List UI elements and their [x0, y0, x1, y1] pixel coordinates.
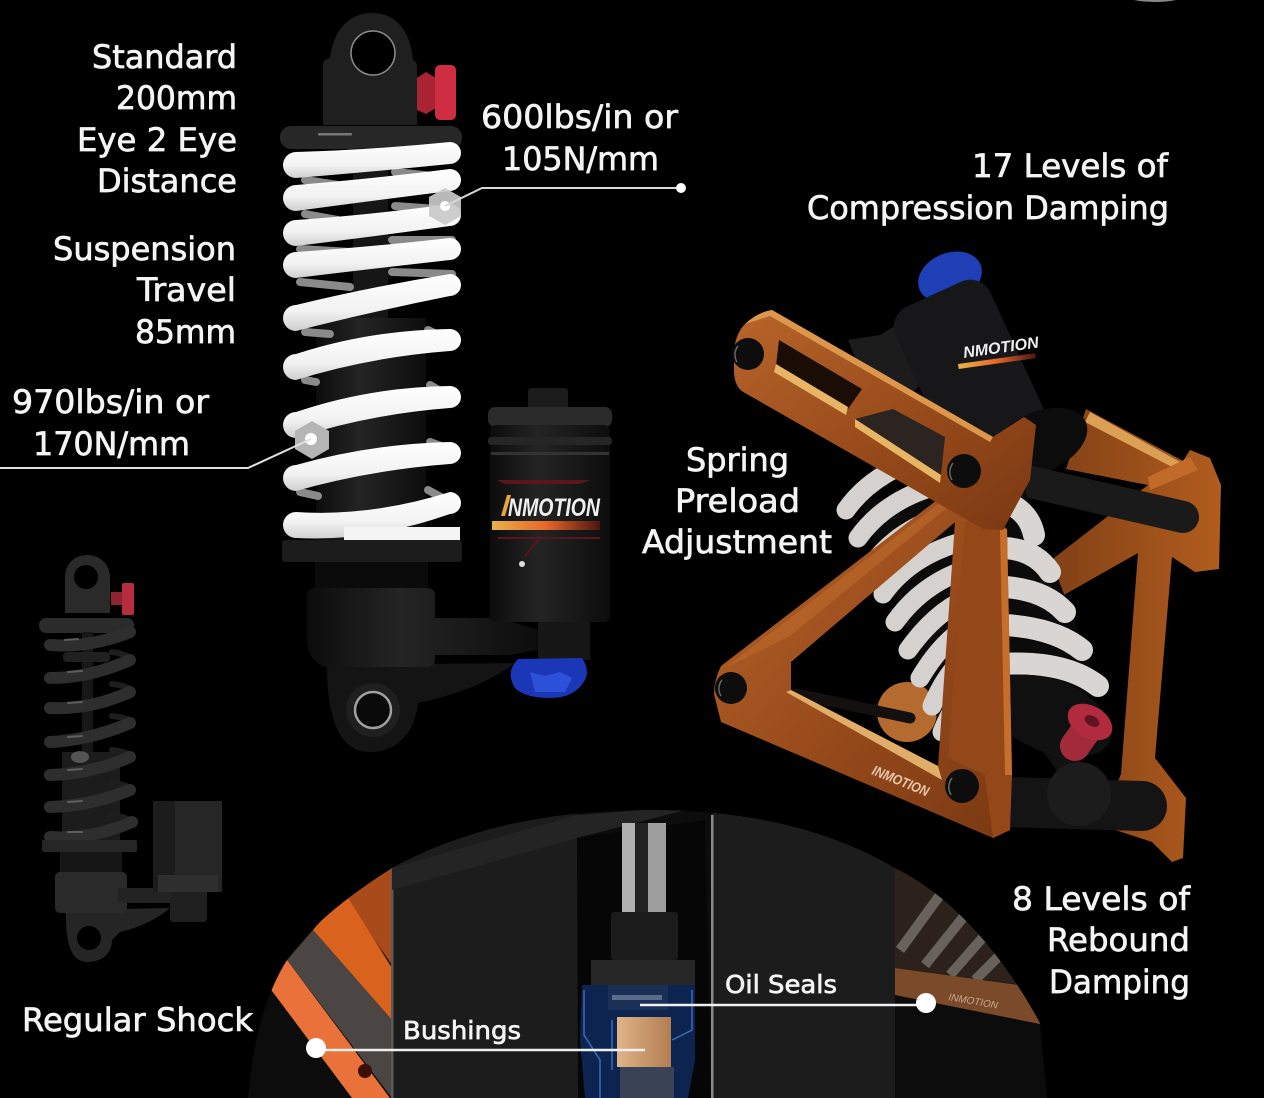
text: suspension travel: Travel	[136, 271, 236, 309]
lower spring seat and elbow	[976, 658, 1142, 826]
shock top eye mount	[323, 13, 417, 125]
arm window slot one	[776, 340, 862, 409]
small thread collar	[60, 852, 122, 872]
label: oil seals: Oil Seals	[725, 970, 837, 999]
text: compression damping	[807, 147, 1169, 227]
small lower seat	[42, 840, 137, 852]
text: 600lbs/in spring rate: 105N/mm	[502, 140, 659, 178]
canister logo bar	[958, 353, 1036, 369]
text: rebound damping	[1012, 880, 1191, 1001]
grey band	[287, 930, 392, 1098]
right dark panel	[712, 800, 895, 1098]
small arm	[118, 888, 207, 922]
rear frame	[1045, 409, 1221, 862]
lower spring seat	[282, 540, 462, 562]
bright orange stripe	[269, 960, 390, 1098]
small reservoir	[153, 801, 222, 892]
text: eye to eye distance	[77, 38, 237, 200]
small coil spring	[50, 632, 132, 837]
red adjuster knob	[417, 65, 456, 120]
dark orange frame piece	[340, 868, 392, 964]
label: bushings: Bushings	[403, 1016, 521, 1045]
text: eye to eye distance: Distance	[97, 162, 237, 200]
bushings leader	[306, 1038, 645, 1058]
centre channel	[577, 838, 578, 1054]
small lower eye	[66, 908, 170, 962]
right brown wedge	[895, 868, 1017, 984]
text: spring preload: Spring	[686, 441, 789, 479]
oil seals leader	[640, 993, 936, 1013]
main shock absorber	[280, 13, 612, 752]
text: compression damping: 17 Levels of	[972, 147, 1169, 185]
orange swing arm assembly	[714, 242, 1221, 862]
text: suspension travel: Suspension	[53, 230, 236, 268]
inner tube	[620, 1067, 674, 1098]
text: compression damping: Compression Damping	[807, 189, 1169, 227]
arm window slot two	[855, 409, 945, 475]
small lower cylinder	[55, 872, 127, 913]
small back coil arcs	[112, 652, 132, 822]
callout: 970lbs/in leader	[0, 421, 329, 468]
piston rod	[635, 823, 648, 912]
dome background and panels	[240, 800, 1060, 1098]
crossing rods	[797, 482, 1183, 742]
front triangular frame	[714, 490, 1010, 838]
logo i mark	[501, 495, 511, 516]
text: 970lbs/in spring rate: 170N/mm	[33, 425, 190, 463]
blue compression knob	[910, 242, 990, 312]
gas reservoir canister	[488, 388, 612, 622]
reservoir neck	[538, 622, 590, 660]
text: 970lbs/in spring rate	[12, 383, 210, 463]
inner shaft and damper body	[316, 148, 426, 542]
rod cap	[611, 912, 678, 960]
text: rebound damping: 8 Levels of	[1012, 880, 1191, 918]
mid orange stripe	[313, 893, 392, 1020]
frame bolts	[715, 338, 981, 803]
left dark panel	[392, 800, 578, 1098]
top arm	[734, 310, 1036, 530]
back coil segments	[300, 172, 452, 503]
regular shock (small dark)	[39, 555, 222, 962]
seal housing	[591, 960, 695, 986]
front leg	[725, 495, 1012, 838]
lower eye mount	[327, 663, 515, 752]
INMOTION logo: NMOTION	[508, 494, 601, 522]
callout: 600lbs/in leader	[429, 183, 686, 225]
bronze bushing	[617, 1017, 671, 1067]
small shaft and body	[62, 632, 120, 842]
small shock top eye	[65, 555, 110, 613]
damper canister (angled)	[848, 242, 1098, 490]
blue rebound knob	[511, 658, 587, 698]
text: rebound damping: Rebound	[1047, 921, 1190, 959]
angled coil spring	[846, 455, 1100, 740]
wedge copper band	[895, 968, 1045, 1025]
small red knob	[111, 583, 134, 615]
text: 970lbs/in spring rate: 970lbs/in or	[12, 383, 210, 421]
text: eye to eye distance: Eye 2 Eye	[77, 121, 237, 159]
canister logo: NMOTION	[962, 334, 1040, 362]
text: suspension travel: 85mm	[135, 313, 236, 351]
text: suspension travel	[53, 230, 236, 351]
text: spring preload: Adjustment	[642, 523, 832, 561]
text: regular shock: Regular Shock	[22, 1001, 253, 1039]
lower cylinder and arm	[307, 588, 538, 667]
cutaway detail dome	[240, 800, 1060, 1098]
logo in wedge: INMOTION	[947, 992, 999, 1012]
text: rebound damping: Damping	[1049, 963, 1190, 1001]
frame logo: INMOTION	[870, 762, 932, 800]
upper spring seat	[280, 126, 462, 149]
red rebound knob	[1061, 696, 1119, 748]
threaded collar	[315, 562, 428, 590]
white coil spring	[283, 142, 461, 541]
text: 600lbs/in spring rate: 600lbs/in or	[481, 98, 679, 136]
text: 600lbs/in spring rate	[481, 98, 679, 178]
text: eye to eye distance: Standard	[92, 38, 237, 76]
logo speed bar	[492, 521, 600, 530]
small upper seat	[39, 618, 134, 633]
text: eye to eye distance: 200mm	[116, 79, 237, 117]
text: spring preload	[642, 441, 832, 561]
blue oil seal housing	[580, 985, 695, 1098]
text: spring preload: Preload	[675, 482, 800, 520]
frame hole	[358, 1064, 372, 1078]
